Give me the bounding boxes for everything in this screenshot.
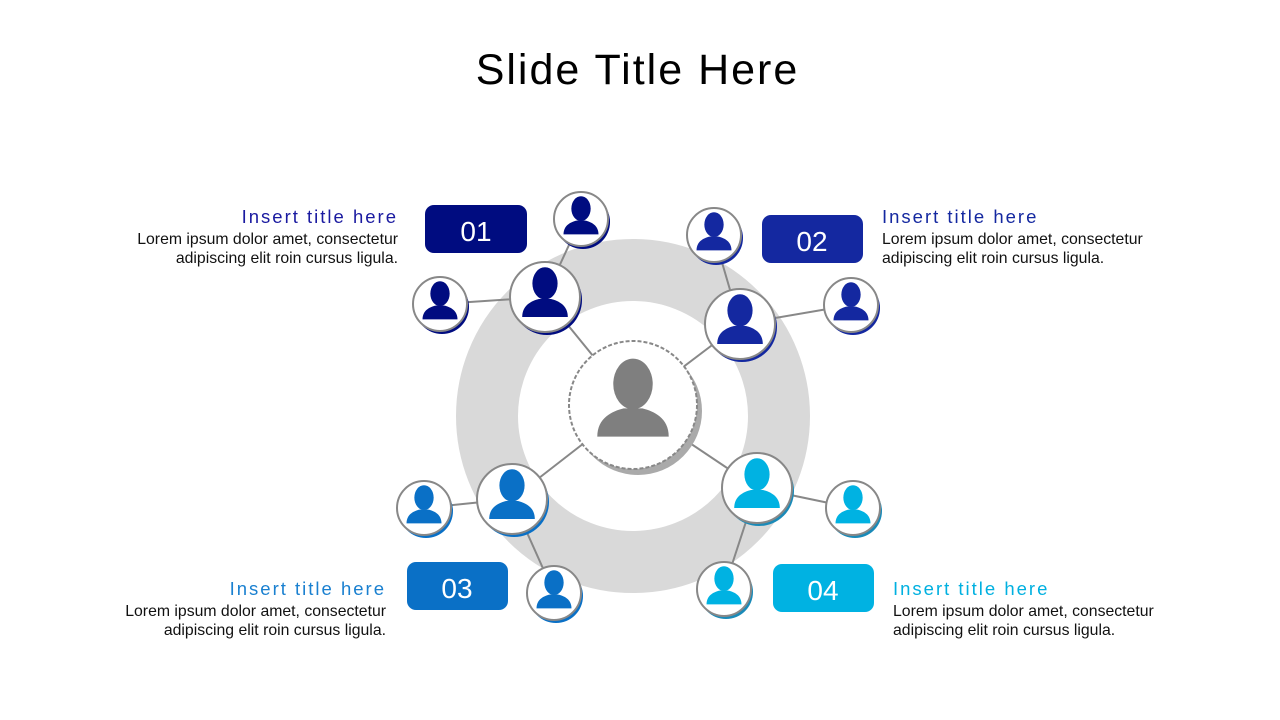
text block 2: Lorem ipsum dolor amet, consectetur (882, 231, 1143, 248)
badge 03: 03 (441, 573, 473, 604)
text block 3: Lorem ipsum dolor amet, consectetur (125, 603, 386, 620)
connectors (424, 219, 853, 593)
text block 3 (125, 578, 386, 639)
text block 4 (893, 578, 1154, 639)
text block 4: Lorem ipsum dolor amet, consectetur (893, 603, 1154, 620)
text block 2 (882, 206, 1143, 267)
badge 04 (773, 564, 874, 612)
text block 1: Insert title here (242, 206, 398, 227)
text block 2: Insert title here (882, 206, 1038, 227)
text block 1: adipiscing elit roin cursus ligula. (176, 250, 398, 267)
title: Slide Title Here (476, 46, 799, 94)
cluster 2 (687, 208, 880, 362)
text block 1 (137, 206, 398, 267)
text block 4: adipiscing elit roin cursus ligula. (893, 622, 1115, 639)
ring (487, 270, 779, 562)
badge 03 (407, 562, 508, 610)
badge 02 (762, 215, 863, 263)
cluster 3 (397, 464, 583, 623)
badge 04: 04 (807, 575, 839, 606)
text block 4: Insert title here (893, 578, 1049, 599)
center person badge (569, 341, 702, 475)
cluster 1 (413, 192, 610, 335)
text block 2: adipiscing elit roin cursus ligula. (882, 250, 1104, 267)
text block 1: Lorem ipsum dolor amet, consectetur (137, 231, 398, 248)
cluster 4 (697, 453, 882, 619)
text block 3: Insert title here (230, 578, 386, 599)
badge 02: 02 (796, 226, 828, 257)
badge 01 (425, 205, 527, 253)
text block 3: adipiscing elit roin cursus ligula. (164, 622, 386, 639)
badge 01: 01 (460, 216, 492, 247)
